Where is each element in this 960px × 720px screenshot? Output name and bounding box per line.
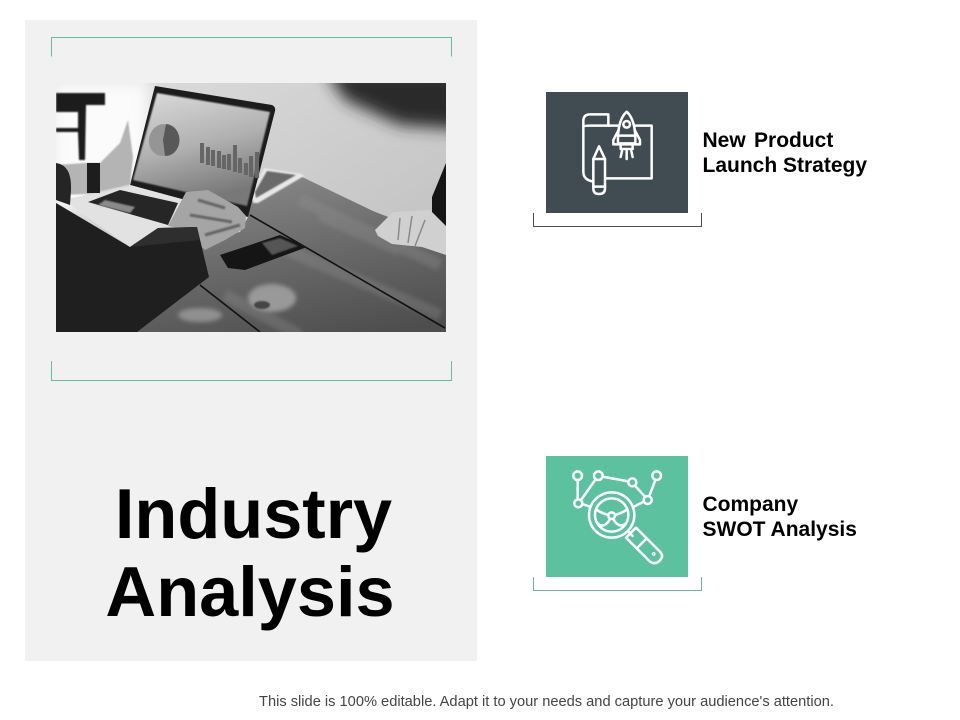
label: new product launch strategy [702, 129, 867, 177]
icon tile: company SWOT [546, 456, 688, 577]
bottom photo bracket [51, 361, 452, 381]
footer note: This slide is 100% editable. Adapt it to your needs and capture your audience's attention. [259, 694, 834, 710]
label: new product launch strategy: New Product [702, 129, 833, 152]
bracket under first tile [533, 213, 702, 227]
title: Industry [115, 474, 392, 552]
title: Analysis [105, 552, 395, 630]
panel: left grey panel with photo and title [25, 20, 477, 661]
label: new product launch strategy: Launch Strategy [702, 154, 867, 177]
label: company SWOT analysis: Company [702, 493, 798, 516]
icon: blueprint, rocket and pencil [582, 110, 653, 196]
top photo bracket [51, 37, 452, 56]
icon tile: new product launch [546, 92, 688, 213]
label: company SWOT analysis [702, 493, 857, 541]
photo: laptop on wooden table [56, 83, 446, 332]
label: company SWOT analysis: SWOT Analysis [702, 518, 857, 541]
title [105, 474, 395, 630]
bracket under second tile [533, 577, 702, 591]
icon: magnifier over network [572, 470, 664, 564]
